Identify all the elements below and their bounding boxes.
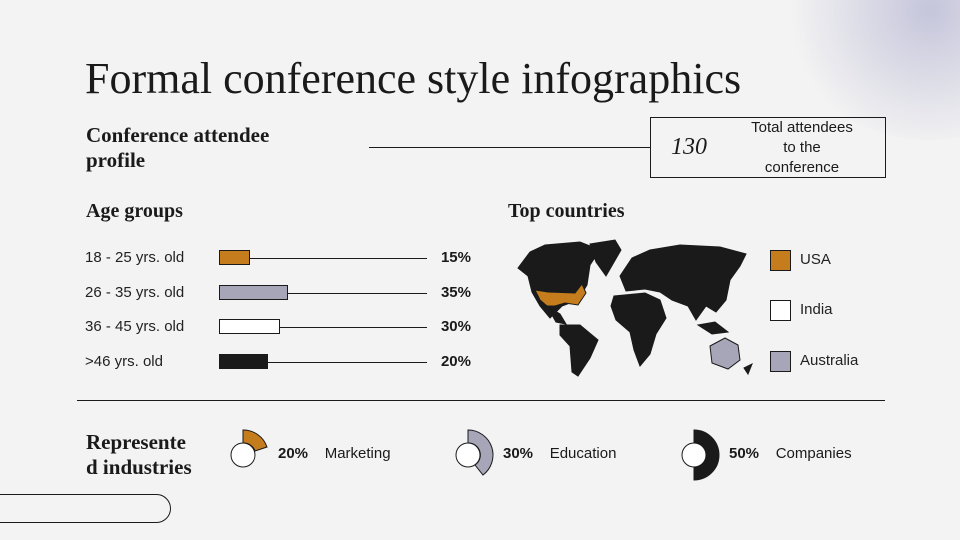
total text: Total attendees bbox=[751, 119, 853, 136]
legend: Australia: Australia bbox=[800, 352, 858, 369]
legend: India bbox=[770, 300, 833, 321]
age bar chart: 26 - 35 yrs. old bbox=[85, 284, 184, 301]
industry: companies: 50% Companies bbox=[729, 445, 852, 462]
heading: represented industries: d industries bbox=[86, 455, 192, 479]
age bar chart: 30% bbox=[441, 318, 471, 335]
age bar chart: 15% bbox=[441, 249, 471, 266]
title: Formal conference style infographics bbox=[85, 54, 741, 103]
decorative pill bbox=[0, 494, 171, 523]
heading: age groups: Age groups bbox=[86, 200, 183, 222]
age bar chart: 35% bbox=[441, 284, 471, 301]
heading: represented industries bbox=[86, 430, 192, 479]
age bar chart: 20% bbox=[441, 353, 471, 370]
heading: represented industries: Represente bbox=[86, 430, 186, 454]
heading: top countries: Top countries bbox=[508, 200, 625, 222]
total attendees box bbox=[650, 117, 886, 178]
age bar chart: 18 - 25 yrs. old bbox=[85, 249, 184, 266]
age bar chart: >46 yrs. old bbox=[85, 353, 163, 370]
number 130: 130 bbox=[671, 134, 707, 160]
legend: Australia bbox=[770, 351, 858, 372]
legend: USA bbox=[770, 250, 831, 271]
subtitle: attendee profile: Conference attendee bbox=[86, 123, 269, 147]
industry: marketing: 20% Marketing bbox=[278, 445, 391, 462]
legend: USA: USA bbox=[800, 251, 831, 268]
total text: conference bbox=[765, 159, 839, 176]
total text bbox=[751, 119, 853, 176]
industry: education: 30% Education bbox=[503, 445, 616, 462]
subtitle: attendee profile: profile bbox=[86, 148, 145, 172]
corner glow bbox=[780, 0, 960, 140]
total text: to the bbox=[783, 139, 821, 156]
legend: India: India bbox=[800, 301, 833, 318]
age bar chart bbox=[85, 249, 471, 370]
subtitle: attendee profile bbox=[86, 123, 269, 172]
age bar chart: 36 - 45 yrs. old bbox=[85, 318, 184, 335]
